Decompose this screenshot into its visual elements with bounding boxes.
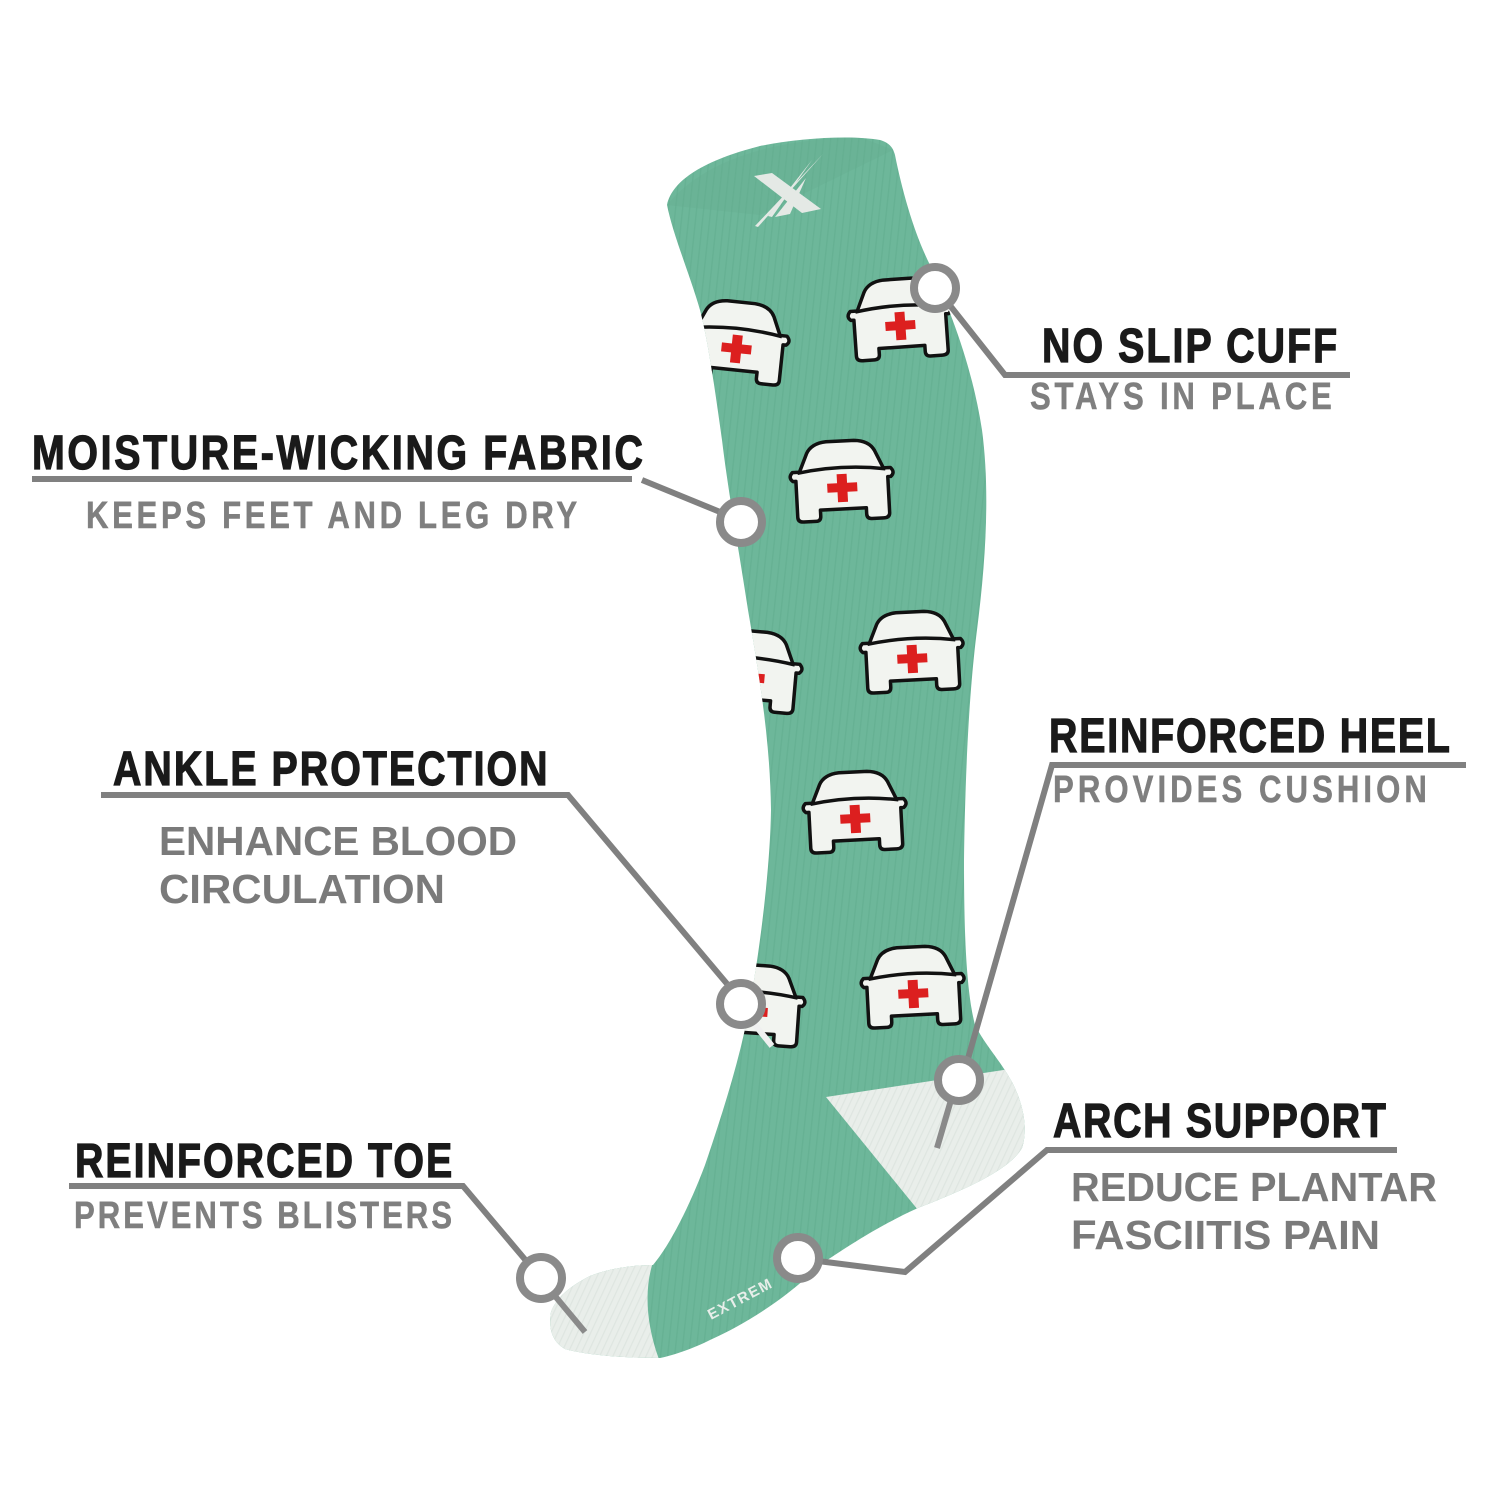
heading: MOISTURE-WICKING FABRIC: [32, 426, 643, 480]
panel: sock illustration: [540, 120, 1040, 1370]
tail: [937, 1100, 951, 1148]
icon: ambulance 3: [788, 438, 895, 523]
subtext: PROVIDES CUSHION: [1053, 769, 1427, 811]
icon: ambulance 7: [744, 963, 807, 1048]
callout: arch support: [777, 1094, 1437, 1279]
subtext: PREVENTS BLISTERS: [74, 1195, 452, 1237]
connector: [948, 303, 1350, 375]
heading: NO SLIP CUFF: [1042, 319, 1337, 373]
callout: reinforced toe: [69, 1134, 585, 1332]
callout: reinforced heel: [937, 709, 1466, 1148]
divider line: [32, 476, 632, 482]
connector: [967, 765, 1466, 1062]
callout: moisture-wicking fabric: [32, 426, 762, 543]
heading: REINFORCED HEEL: [1049, 709, 1450, 763]
subtext: ENHANCE BLOOD: [159, 818, 517, 864]
sock body: [540, 120, 1040, 1370]
marker: [777, 1237, 819, 1279]
toe panel: [550, 1265, 658, 1358]
icon: ambulance 2: [846, 276, 954, 361]
subtext line 2: CIRCULATION: [159, 866, 445, 912]
subtext: REDUCE PLANTAR: [1071, 1164, 1437, 1210]
connector: [101, 795, 728, 985]
subtext: STAYS IN PLACE: [1030, 376, 1332, 418]
heading: ARCH SUPPORT: [1053, 1094, 1386, 1148]
marker: [914, 267, 956, 309]
icon: ambulance 6: [801, 769, 908, 854]
marker: [720, 983, 762, 1025]
callout: ankle protection: [101, 742, 772, 1046]
icon: ambulance 4: [751, 629, 804, 716]
subtext line 2: FASCIITIS PAIN: [1071, 1212, 1380, 1258]
tail: [751, 1020, 772, 1046]
icon: ambulance 8: [859, 944, 966, 1029]
icon: X logo: [754, 154, 823, 227]
callout: no slip cuff: [914, 267, 1350, 418]
marker: [520, 1257, 562, 1299]
icon: cuff darker band: [852, 138, 860, 139]
marker: [938, 1059, 980, 1101]
heel panel: [826, 1069, 1040, 1210]
subtext: KEEPS FEET AND LEG DRY: [86, 495, 577, 537]
connector: [818, 1150, 1397, 1272]
marker: [720, 501, 762, 543]
heading: ANKLE PROTECTION: [113, 742, 548, 796]
brand text on sole: EXTREM: [705, 1275, 776, 1324]
heading: REINFORCED TOE: [75, 1134, 452, 1188]
connector: [69, 1186, 528, 1263]
tail: [555, 1296, 585, 1332]
icon: ambulance 5: [858, 609, 965, 694]
icon: ambulance 1: [701, 299, 791, 387]
connector: [642, 480, 725, 514]
